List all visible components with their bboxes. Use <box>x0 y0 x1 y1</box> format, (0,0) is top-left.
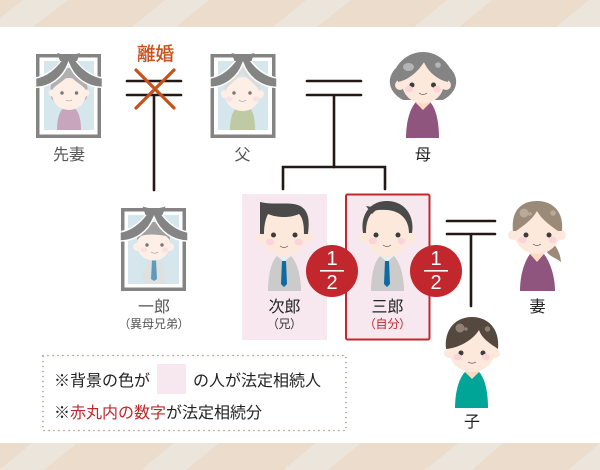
portrait: father <box>210 53 277 136</box>
Saburo label: （自分） <box>369 317 406 331</box>
divorce cross <box>136 70 174 108</box>
badge: 1/2 for Jiro: 1 <box>326 248 338 270</box>
Saburo label <box>369 298 406 331</box>
legend line 2: ※赤丸内の数字が法定相続分 <box>54 404 262 422</box>
person: Jiro <box>255 202 313 291</box>
bottom decorative band <box>0 443 600 470</box>
Ichiro label <box>124 298 184 331</box>
Jiro label: 次郎 <box>268 298 301 316</box>
person: child <box>444 317 500 408</box>
Saburo label: 三郎 <box>371 298 404 316</box>
former wife label: 先妻 <box>53 146 85 164</box>
badge: 1/2 for Jiro <box>306 245 358 297</box>
legend line 1 continued: の人が法定相続人 <box>193 372 321 390</box>
father label: 父 <box>234 147 251 164</box>
family tree lines <box>127 81 495 306</box>
legend line 1: ※背景の色が <box>54 372 150 390</box>
wife label: 妻 <box>529 298 546 316</box>
portrait: half-brother Ichiro <box>120 206 188 289</box>
child label: 子 <box>464 413 480 431</box>
person: mother <box>390 52 456 138</box>
panel: heir background 三郎 (self) <box>346 194 430 340</box>
top decorative band <box>0 0 600 27</box>
Jiro label <box>268 298 301 331</box>
panel: heir background 次郎 <box>242 194 327 340</box>
legend box <box>43 356 346 430</box>
badge: 1/2 for Jiro: 2 <box>326 272 338 294</box>
Ichiro label: 一郎 <box>138 298 170 316</box>
badge: 1/2 for Saburo: 2 <box>430 272 442 294</box>
mother label: 母 <box>415 147 431 164</box>
legend colour swatch <box>157 364 186 394</box>
Jiro label: （兄） <box>272 317 297 331</box>
person: Saburo <box>358 201 416 291</box>
portrait: former wife <box>36 53 102 136</box>
divorce label: 離婚 <box>137 44 174 64</box>
badge: 1/2 for Saburo: 1 <box>430 248 442 270</box>
badge: 1/2 for Saburo <box>410 245 462 297</box>
Ichiro label: （異母兄弟） <box>124 317 184 331</box>
person: wife <box>508 201 566 291</box>
